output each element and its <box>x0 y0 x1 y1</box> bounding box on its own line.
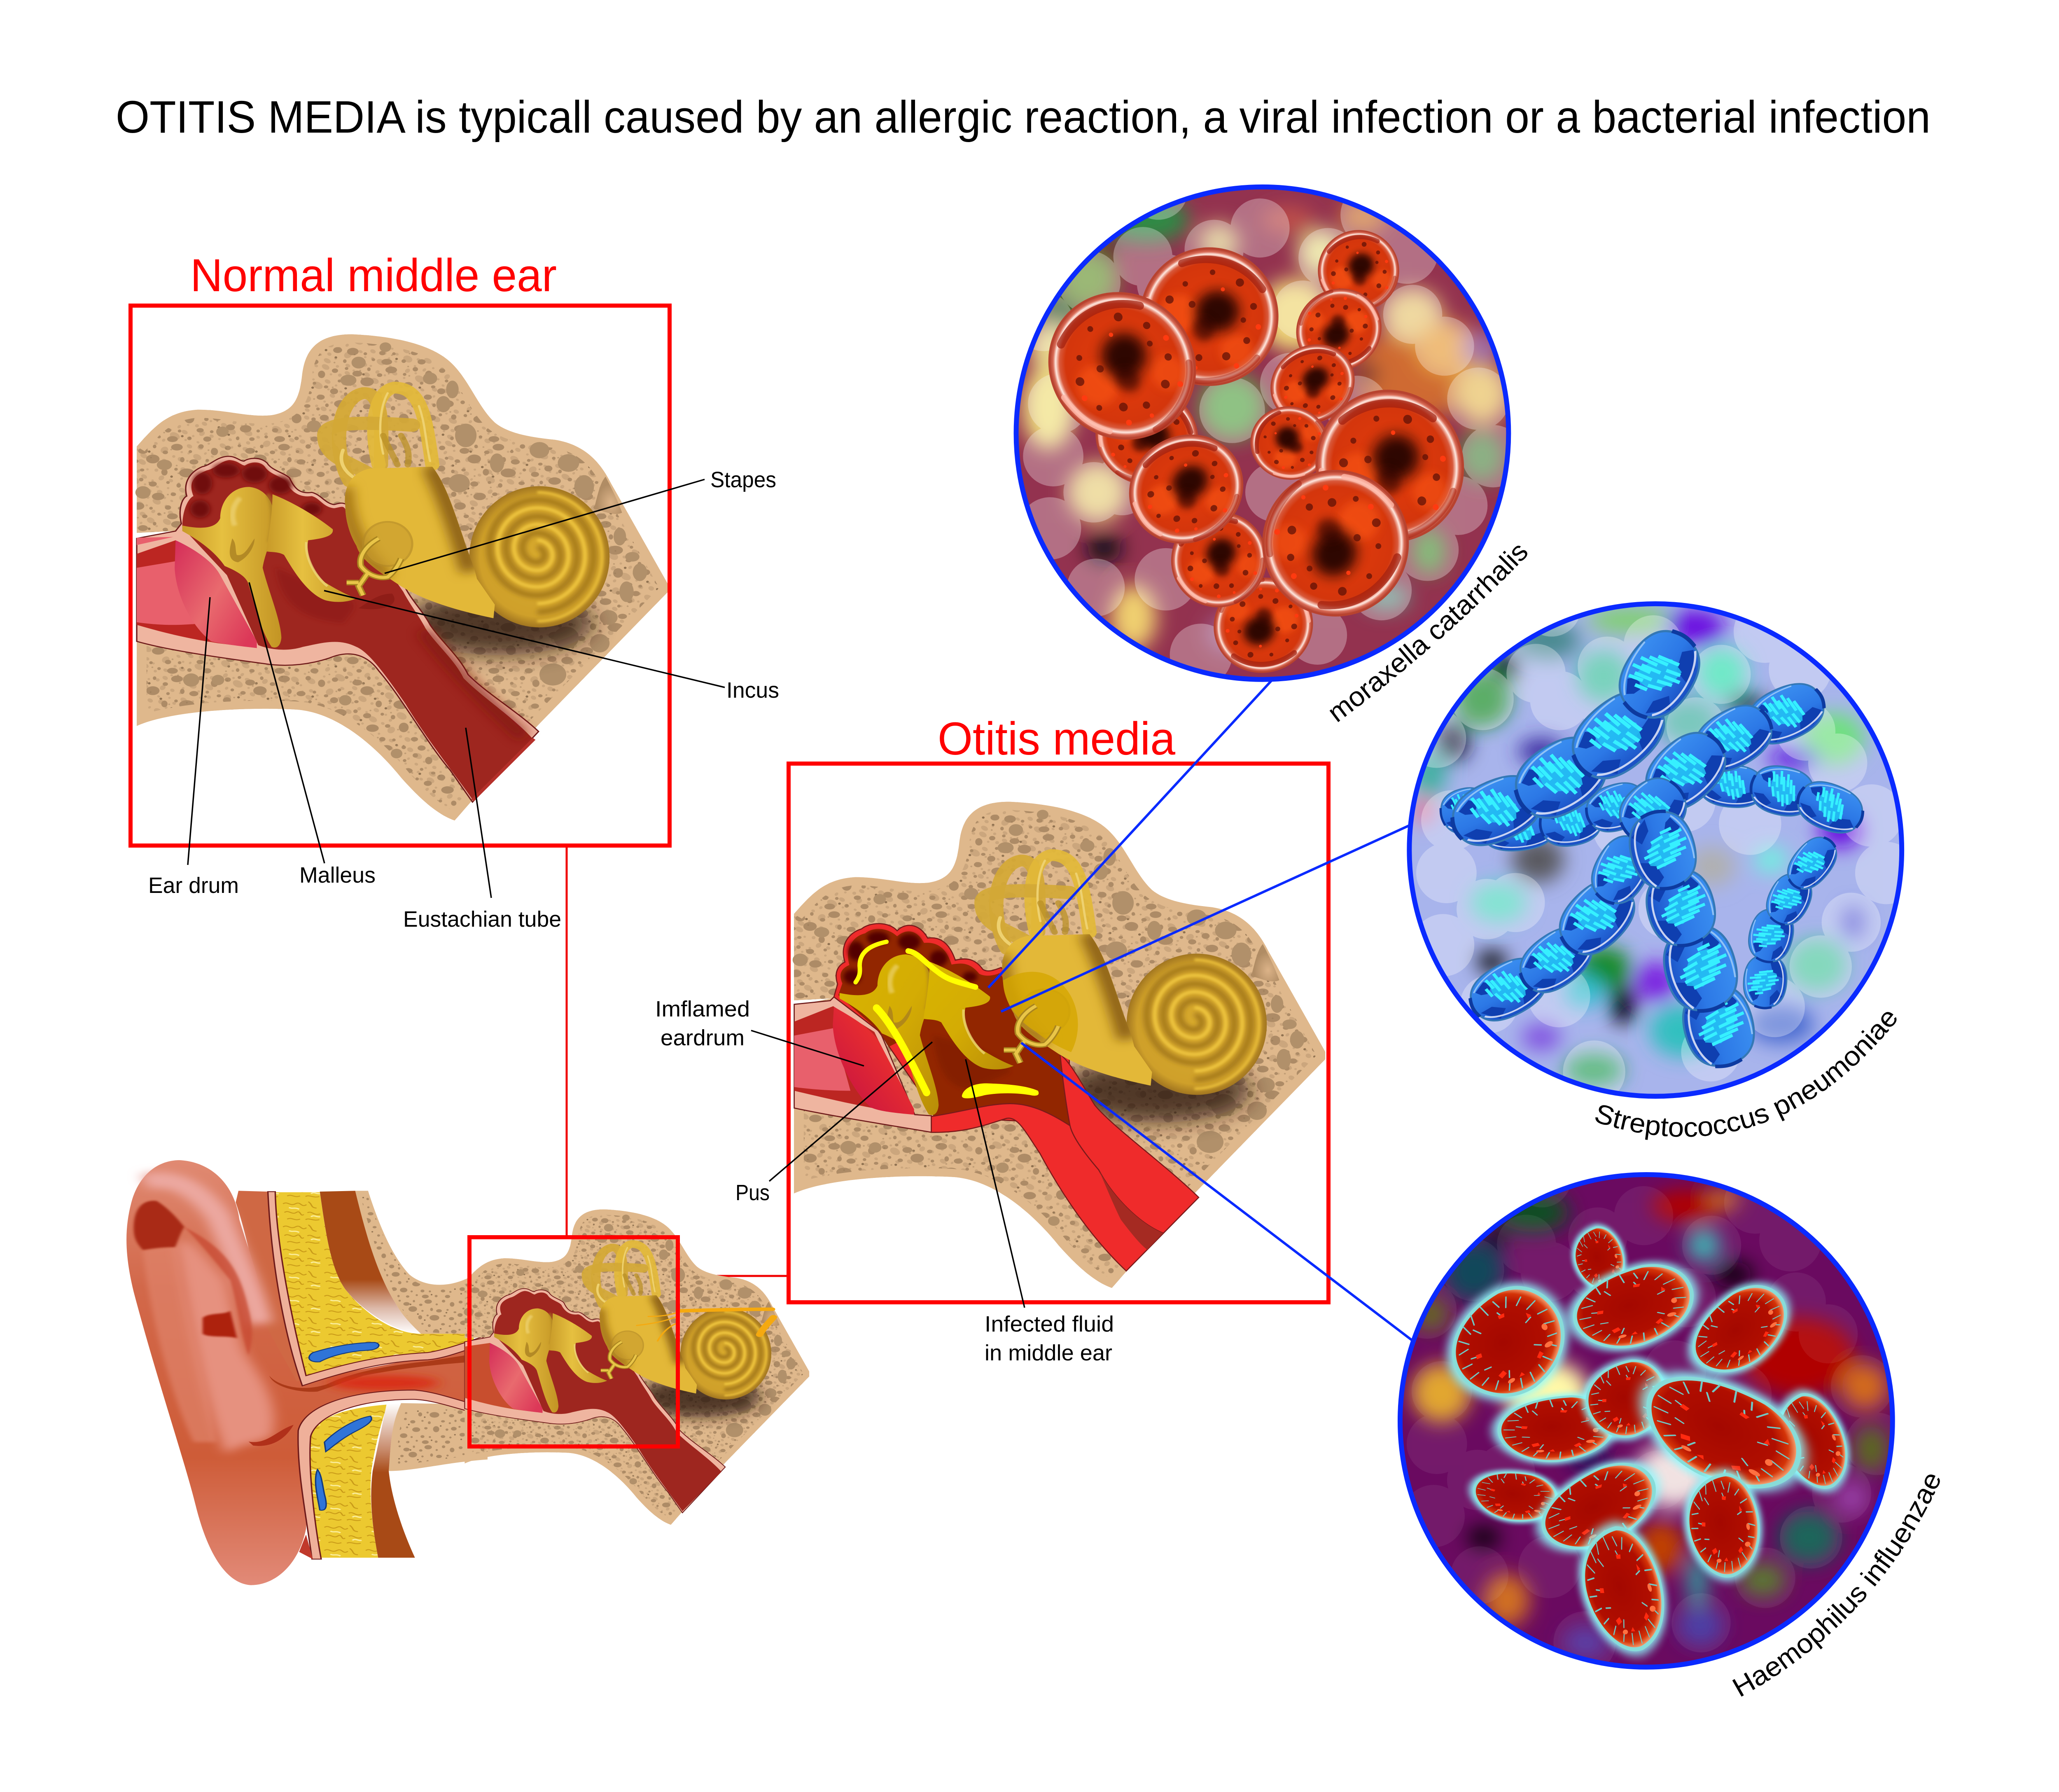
connector: normal panel to small ear box <box>566 846 567 1237</box>
panel: otitis media diagram <box>789 764 1331 1302</box>
cochlear nerve strands <box>637 1309 773 1341</box>
panel: normal middle ear diagram <box>131 306 673 846</box>
panel frame <box>789 764 1328 1302</box>
leader lines: normal ear labels <box>188 479 725 898</box>
label: Imflamed eardrum: Imflamed <box>655 997 750 1021</box>
whole ear illustration <box>126 1160 813 1585</box>
label: Eustachian tube: Eustachian tube <box>403 907 561 932</box>
connector: small ear box to otitis panel <box>677 1275 789 1277</box>
heading: otitis media: Otitis media <box>938 713 1176 764</box>
label: Streptococcus pneumoniae: Streptococcus pneumoniae <box>1591 1002 1904 1142</box>
panel: Streptococcus pneumoniae microscope circle <box>1407 601 1904 1099</box>
label: Incus: Incus <box>726 678 779 703</box>
label: Stapes: Stapes <box>710 467 776 492</box>
panel frame <box>131 306 670 846</box>
panel: moraxella catarrhalis microscope circle <box>1009 161 1524 689</box>
heading: normal middle ear: Normal middle ear <box>190 250 557 301</box>
pus deposits <box>856 942 976 1093</box>
panel: Haemophilus influenzae microscope circle <box>1398 1172 1895 1670</box>
label: Malleus: Malleus <box>299 863 376 888</box>
bacteria callout lines <box>988 680 1415 1341</box>
leader lines: otitis labels <box>751 1030 1025 1308</box>
label: Infected fluid in middle ear: Infected fluid <box>985 1312 1114 1336</box>
title: OTITIS MEDIA is typicall caused by an allergic reaction, a viral infection or a bacterial infection <box>116 92 1931 143</box>
inflamed stapes overlay <box>1003 972 1078 1052</box>
label: Imflamed eardrum: eardrum <box>661 1026 745 1050</box>
label: Pus: Pus <box>735 1180 770 1205</box>
label: Haemophilus influenzae: Haemophilus influenzae <box>1727 1467 1947 1703</box>
label: moraxella catarrhalis: moraxella catarrhalis <box>1322 536 1534 728</box>
label: Infected fluid in middle ear: in middle ear <box>985 1341 1112 1365</box>
detail box frame <box>469 1237 678 1446</box>
label: Ear drum: Ear drum <box>148 873 239 898</box>
